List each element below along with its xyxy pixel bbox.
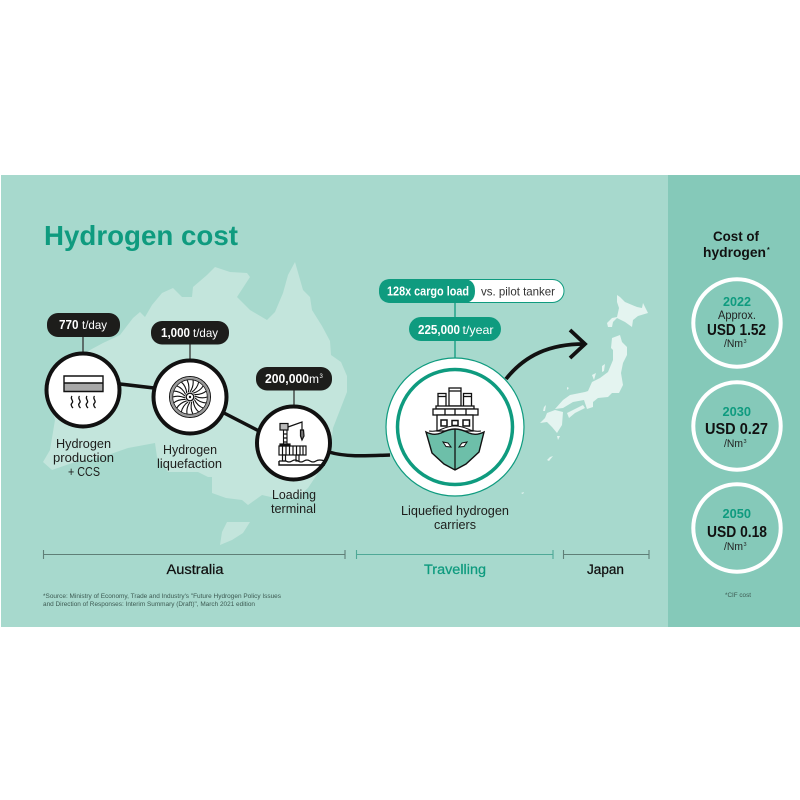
pill: 200,000 m3: 200,000 [265,372,309,386]
pill: 200,000 m3: m [309,372,319,386]
icon: ship [426,388,484,470]
pill: 200,000 m3 [256,367,332,390]
cost circle 2030: /Nm [724,438,743,450]
pill: 128x cargo load vs. pilot tanker [379,279,564,303]
node: liquefied hydrogen carriers [386,358,524,496]
label: loading terminal [271,488,316,516]
cost circle 2022: 2022 [723,295,751,309]
timeline: Australia [44,550,345,577]
label: loading terminal: terminal [271,502,316,516]
stems [83,336,294,405]
cost circle 2030: 2030 [722,405,751,419]
node: loading terminal [257,406,330,480]
cost circle 2022: /Nm [724,338,743,350]
source footnote: *Source: Ministry of Economy, Trade and Industry's "Future Hydrogen Policy Issues [43,593,281,600]
pill: 770 t/day: 770 [59,318,79,332]
source footnote: and Direction of Responses: Interim Summary (Draft)", March 2021 edition [43,601,255,608]
cost circle 2022: USD 1.52 [707,322,766,339]
label: hydrogen liquefaction [157,443,222,471]
label: hydrogen production: production [53,451,114,465]
pill: 1,000 t/day: t/day [193,326,218,340]
label: liquefied hydrogen carriers [401,504,509,532]
icon: loading platform [279,422,325,465]
cost circle 2022: Approx. [718,310,756,322]
pill: 1,000 t/day: 1,000 [161,326,190,340]
label: loading terminal: Loading [272,488,316,502]
pill: 770 t/day: t/day [82,318,107,332]
pill: 128x cargo load vs. pilot tanker: 128x cargo load [387,284,469,298]
title: Hydrogen cost [44,220,238,251]
arrow to Japan [506,330,585,379]
main panel background [1,175,668,627]
cost circle 2022 [693,279,781,367]
timeline: Japan [564,550,649,577]
pill: 225,000 t/year: t/year [462,323,494,337]
label: liquefied hydrogen carriers: Liquefied hydrogen [401,504,509,518]
cost circle 2050 [693,484,781,572]
label: hydrogen production: + CCS [68,465,100,479]
label: hydrogen liquefaction: Hydrogen [163,443,217,457]
timeline: Australia: Australia [166,562,224,577]
CIF footnote: *CIF cost [725,592,751,599]
timeline: Travelling [356,550,553,577]
timeline: Travelling: Travelling [424,562,486,577]
panel heading: * [767,247,770,254]
pill: 200,000 m3: 3 [320,374,324,380]
cost circle 2050: 2050 [722,507,751,521]
cost circle 2030: 3 [744,439,747,445]
map: Australia [43,262,347,545]
cost circle 2050: USD 0.18 [707,524,767,541]
icon: air unit with heat [64,376,103,408]
cost circle 2050: /Nm [724,541,743,553]
pill: 770 t/day [47,313,120,337]
icon: turbine [170,376,210,418]
pill: 128x cargo load vs. pilot tanker: vs. pilot tanker [481,284,555,298]
pill: 225,000 t/year: 225,000 [418,323,460,337]
label: hydrogen production: Hydrogen [56,437,111,451]
node: hydrogen production [46,354,120,426]
pill: 225,000 t/year [409,317,501,341]
panel heading: hydrogen [703,244,766,260]
cost circle 2030 [693,382,781,470]
timeline: Japan: Japan [587,562,624,577]
label: hydrogen liquefaction: liquefaction [157,457,222,471]
node: hydrogen liquefaction [154,360,226,434]
cost circle 2050: 3 [744,542,747,548]
connector lines [120,384,390,456]
label: hydrogen production [53,437,114,479]
panel heading [703,228,770,260]
panel heading: Cost of [713,228,759,244]
cost circle 2022: 3 [744,339,747,345]
stem: carrier stats [454,300,456,358]
right panel: cost of hydrogen [668,175,800,627]
pill: 1,000 t/day [151,321,229,344]
cost circle 2030: USD 0.27 [705,421,768,438]
label: liquefied hydrogen carriers: carriers [434,518,476,532]
source footnote [43,593,281,608]
map: Japan [521,295,648,494]
